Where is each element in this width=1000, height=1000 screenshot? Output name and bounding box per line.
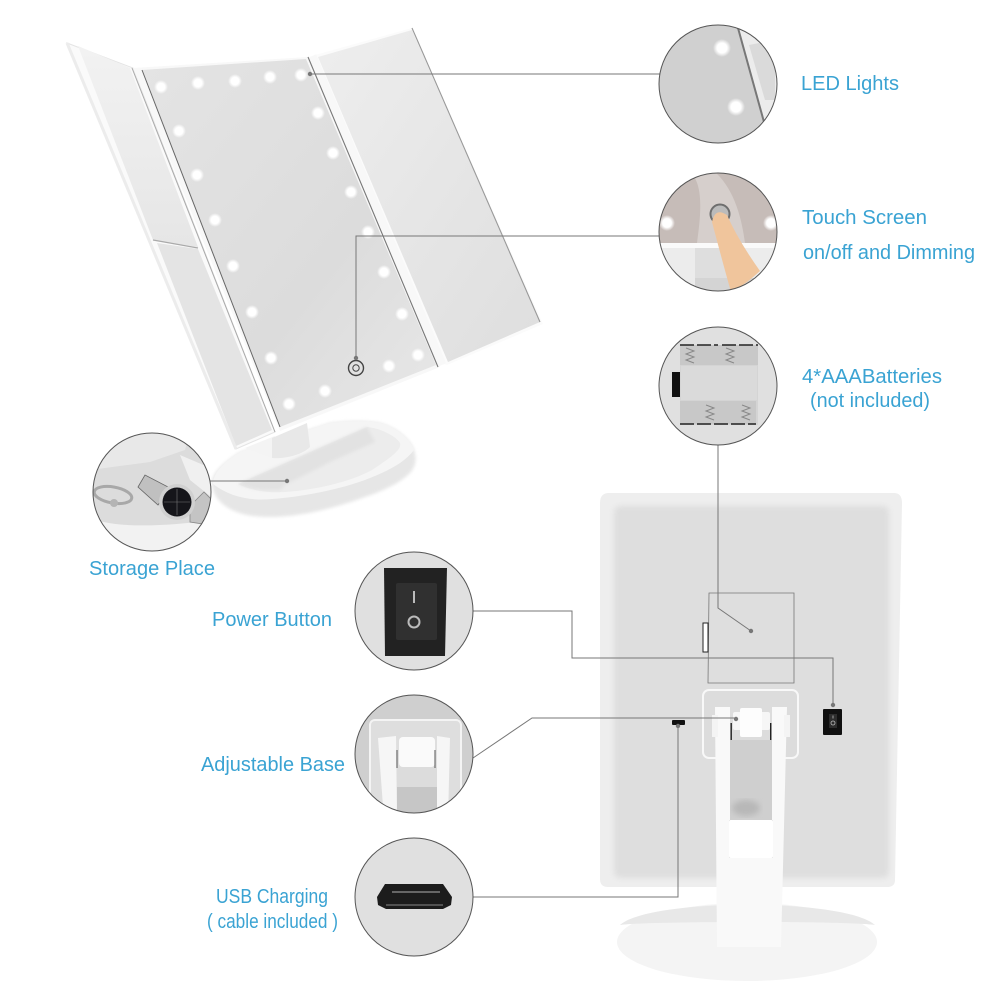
detail: USB charging [354,838,474,956]
ring [93,484,133,506]
icon: usb port [672,720,685,725]
left wing [67,43,275,449]
mirror base [212,421,416,517]
label: on/off and Dimming: on/off and Dimming [803,242,975,264]
label: not included: (not included) [810,390,930,412]
connector dots [285,72,835,728]
label: LED Lights: LED Lights [801,73,899,95]
label: Power Button: Power Button [212,609,332,631]
hinge plate [703,690,798,758]
icon: power switch [823,709,842,735]
rear mirror back [600,493,902,887]
mirror stem [245,423,310,458]
detail: storage place [90,430,215,555]
label: Storage Place: Storage Place [89,558,215,580]
detail: battery compartment [658,326,778,446]
detail: touch screen [658,172,778,292]
rear view mirror [600,493,902,981]
stand arm [712,707,790,947]
rear base [617,903,877,981]
watch [138,475,170,505]
detail: power button [354,552,474,670]
side slot [703,623,708,652]
icon: touch button [348,360,364,376]
label: Adjustable Base: Adjustable Base [201,754,345,776]
center panel [132,57,440,432]
right wing [312,28,543,365]
detail: adjustable base [354,694,474,814]
LED lights [154,68,425,411]
label: Touch Screen: Touch Screen [802,207,927,229]
tri-fold mirror, front view [67,28,543,517]
detail: LED lights [658,24,778,144]
label: 4*AAA Batteries: 4*AAABatteries [802,366,942,388]
label: USB Charging: USB Charging [216,886,328,908]
label: cable included: ( cable included ) [207,911,338,933]
connector lines [210,74,833,897]
battery door [708,593,794,683]
rear inner panel [614,506,889,878]
